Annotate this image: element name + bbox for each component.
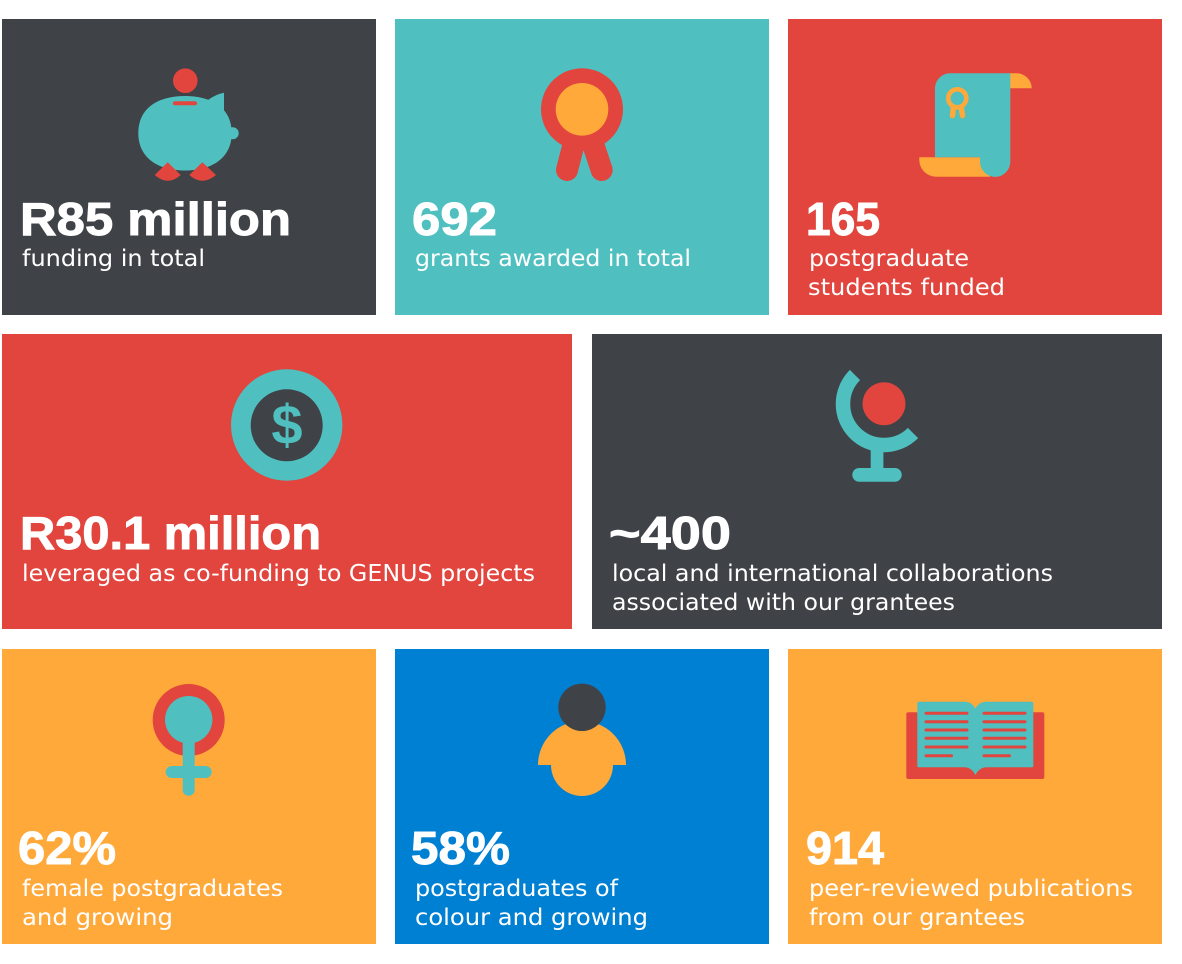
panel: funding in total: [2, 19, 376, 315]
panel: postgraduate students funded: [788, 19, 1162, 315]
text: postgraduates of colour: postgraduates of: [415, 876, 619, 902]
text: female postgraduates: and growing: [22, 905, 173, 931]
icon: dollar coin: $: [271, 393, 303, 456]
text: publications: peer-reviewed publications: [809, 876, 1133, 902]
panel: co-funding leveraged: [2, 334, 572, 629]
text: postgraduates of colour: [415, 876, 648, 931]
icon: open book: [906, 702, 1044, 779]
heading: R30.1 million: R30.1 million: [20, 507, 321, 559]
panel: collaborations: [592, 334, 1162, 629]
panel: publications: [788, 649, 1162, 944]
text: collaborations: [612, 561, 1053, 616]
icon: person: [538, 684, 626, 796]
heading: R85 million: R85 million: [20, 193, 291, 245]
text: publications: [809, 876, 1133, 931]
icon: globe: [843, 375, 913, 482]
text: postgraduate students funded: [808, 246, 1005, 301]
heading: 62%: 62%: [18, 822, 116, 874]
panel: female postgraduates: [2, 649, 376, 944]
text: publications: from our grantees: [809, 905, 1025, 931]
heading: 165: 165: [806, 193, 880, 245]
heading: 692: 692: [412, 193, 497, 245]
icon: female symbol: [153, 684, 225, 790]
text: funding in total: funding in total: [22, 246, 205, 272]
text: leveraged as co-funding: leveraged as co-funding to GENUS projects: [22, 561, 535, 587]
icon: award ribbon: [541, 68, 623, 170]
icon: piggy bank: [138, 68, 239, 181]
text: postgraduate students funded: students funded: [808, 275, 1005, 301]
text: female postgraduates: female postgraduates: [22, 876, 283, 902]
heading: ~400: ~400: [609, 507, 731, 559]
panel: grants awarded: [395, 19, 769, 315]
icon: dollar coin: [231, 369, 342, 481]
heading: 58%: 58%: [411, 822, 510, 874]
text: collaborations: local and international collaborations: [612, 561, 1053, 587]
text: grants awarded in total: grants awarded in total: [415, 246, 691, 272]
text: collaborations: associated with our grantees: [612, 590, 955, 616]
text: postgraduate students funded: postgraduate: [809, 246, 969, 272]
text: female postgraduates: [22, 876, 283, 931]
text: postgraduates of colour: colour and growing: [415, 905, 648, 931]
heading: 914: 914: [806, 822, 884, 874]
panel: postgraduates of colour: [395, 649, 769, 944]
icon: diploma scroll: [919, 73, 1032, 177]
